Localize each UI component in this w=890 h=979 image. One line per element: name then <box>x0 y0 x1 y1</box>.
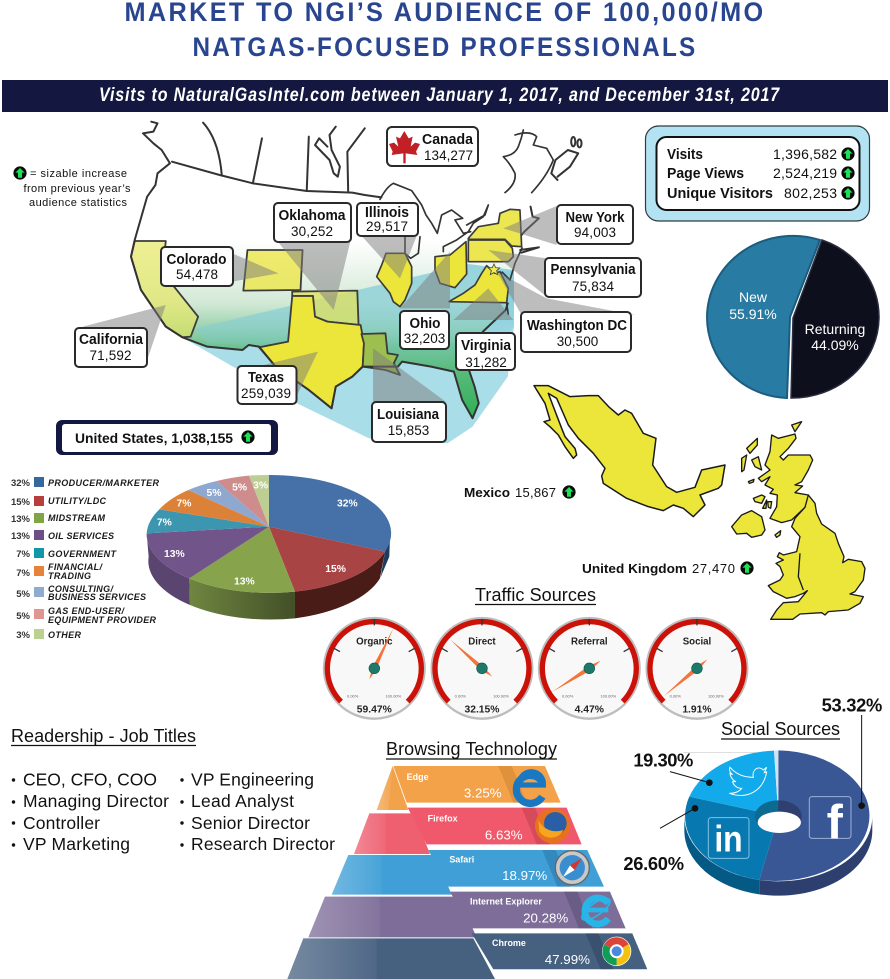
leader: Twitter <box>670 772 713 786</box>
bar: Internet Explorer: Internet Explorer <box>470 897 542 907</box>
label: United States total <box>56 420 278 455</box>
gauge: Direct: Direct <box>468 637 496 648</box>
values: 19.30% <box>633 750 693 771</box>
chart: browser pyramid <box>287 766 647 979</box>
text block: job titles left column <box>12 770 169 854</box>
pyramid tier: Safari <box>332 855 452 895</box>
label: New York <box>557 205 633 244</box>
text block: job titles left column: Controller <box>23 813 100 833</box>
label: Louisiana: Louisiana <box>377 407 440 423</box>
label: United Kingdom <box>582 561 754 576</box>
heading: Readership job titles: Readership - Job Titles <box>11 726 196 746</box>
values: 26.60% <box>623 853 684 874</box>
legend: industry pie <box>11 477 160 641</box>
text block: job titles right column: Research Director <box>191 834 335 854</box>
gauge: Social <box>647 618 747 719</box>
pyramid tier: Edge <box>377 766 408 810</box>
state: Pennsylvania <box>468 240 513 262</box>
slice: financial <box>159 490 269 527</box>
map: Great Lakes and northeast states <box>362 130 635 320</box>
label: Texas <box>238 366 296 404</box>
bar: Firefox: 6.63% <box>485 827 523 842</box>
donut side wall <box>684 816 759 894</box>
legend: industry pie: 7% <box>16 549 31 560</box>
icon: Firefox <box>535 808 570 843</box>
label: Texas: 259,039 <box>241 386 291 401</box>
label: Illinois: Illinois <box>365 205 409 221</box>
map: US land <box>131 162 520 418</box>
icon: Safari <box>555 851 589 885</box>
gauge: Social: 0.00% <box>670 694 681 699</box>
label: Mexico: 15,867 <box>515 485 556 500</box>
icon: Facebook <box>809 795 851 849</box>
state: Texas <box>259 296 364 408</box>
legend: industry pie: 5% <box>16 589 31 600</box>
label: Colorado: 54,478 <box>176 267 218 282</box>
slice: oil services <box>147 527 269 578</box>
banner: visits period: Visits to NaturalGasIntel.com between January 1, 2017, and December 31st, 2017 <box>99 85 780 106</box>
bar: Firefox <box>408 808 582 844</box>
pie value labels: 13% <box>234 577 255 588</box>
bar: Chrome: Chrome <box>492 938 526 948</box>
text block: job titles left column: CEO, CFO, COO <box>23 770 157 790</box>
donut hole <box>755 800 802 833</box>
text block: job titles left column: VP Marketing <box>23 834 130 854</box>
legend: industry pie: FINANCIAL/ <box>48 562 103 572</box>
pie value labels: 32% <box>337 498 358 509</box>
legend note: green arrow: from previous year’s <box>24 183 131 195</box>
gauge: Social: 100.00% <box>708 694 724 699</box>
pie value labels: 5% <box>207 488 221 499</box>
slice: Returning <box>791 240 879 398</box>
label: Virginia <box>456 333 515 370</box>
gauge: Referral <box>539 618 640 719</box>
map: Mexico <box>534 386 725 517</box>
gauge: Direct: 0.00% <box>455 694 466 699</box>
label: Illinois <box>357 203 418 236</box>
chart: social sources donut <box>623 695 882 896</box>
pie chart: new vs returning: 44.09% <box>811 337 859 353</box>
values: 53.32% <box>822 695 882 716</box>
legend note: green arrow <box>13 166 131 209</box>
label: Ohio: Ohio <box>410 316 441 332</box>
label: Pennsylvania: Pennsylvania <box>550 262 636 278</box>
chart: industry 3D pie <box>147 475 391 620</box>
label: Oklahoma <box>274 203 351 242</box>
map: teal overlay on land <box>195 264 514 367</box>
legend: industry pie: 13% <box>11 531 31 542</box>
bar: Safari <box>428 850 604 887</box>
label: Mexico <box>464 485 576 500</box>
banner: visits period <box>2 80 888 112</box>
state: Ohio <box>435 242 467 288</box>
stats panel: 802,253 <box>784 185 837 201</box>
slice: utility <box>269 527 385 592</box>
pie chart: new vs returning: New <box>739 289 768 305</box>
gauge: Organic: 59.47% <box>357 705 392 716</box>
label: California <box>75 328 147 367</box>
icon: LinkedIn: in <box>714 819 743 860</box>
label: California: 71,592 <box>90 348 132 363</box>
gauge: Direct: 100.00% <box>493 694 509 699</box>
callout beams <box>83 242 446 403</box>
heading: Social Sources: Social Sources <box>721 719 840 739</box>
map: blue gulf beam <box>182 264 514 443</box>
legend: industry pie: 32% <box>11 478 31 489</box>
leader: LinkedIn <box>660 805 698 828</box>
legend: industry pie: OIL SERVICES <box>48 531 114 541</box>
state: Louisiana <box>361 333 400 375</box>
state: Colorado <box>243 250 303 291</box>
stats panel: 2,524,219 <box>773 165 837 181</box>
legend: industry pie: MIDSTREAM <box>48 513 106 523</box>
label: Colorado: Colorado <box>166 252 227 268</box>
text block: job titles right column: VP Engineering <box>191 770 314 790</box>
map: Canada and coast lines <box>131 122 582 418</box>
icon: maple leaf <box>389 131 420 163</box>
label: Canada: Canada <box>422 132 474 148</box>
legend: industry pie: GOVERNMENT <box>48 549 118 559</box>
slice: midstream <box>189 527 295 593</box>
legend: industry pie: EQUIPMENT PROVIDER <box>48 615 156 625</box>
legend: industry pie: BUSINESS SERVICES <box>48 592 146 602</box>
leader: Facebook <box>858 715 865 809</box>
legend: industry pie: GAS END-USER/ <box>48 606 125 616</box>
label: Louisiana <box>372 402 446 442</box>
label: United States total: United States, 1,038,155 <box>75 431 234 446</box>
state: Oklahoma <box>292 291 359 325</box>
legend: industry pie: OTHER <box>48 630 82 640</box>
bar: Safari: Safari <box>449 855 474 865</box>
label: Washington DC <box>521 312 631 352</box>
label: New York: 94,003 <box>574 225 616 240</box>
icon: Edge <box>516 772 546 803</box>
label: Illinois: 29,517 <box>366 219 408 234</box>
label: Pennsylvania <box>545 258 641 297</box>
pie side walls <box>147 533 190 605</box>
pie value labels: 13% <box>164 549 185 560</box>
label: Oklahoma: Oklahoma <box>278 208 346 224</box>
pie value labels: 15% <box>325 564 346 575</box>
gauge: Direct <box>432 618 532 719</box>
label: Washington DC: Washington DC <box>527 318 627 334</box>
lake lines <box>380 130 553 258</box>
bar: Internet Explorer: 20.28% <box>523 911 568 926</box>
gauge: Organic: 0.00% <box>347 694 359 699</box>
stats panel: Page Views <box>667 166 744 182</box>
label: California: California <box>79 332 144 348</box>
bar: Edge <box>393 766 561 803</box>
heading: Browsing Technology: Browsing Technology <box>386 739 557 759</box>
text block: job titles right column <box>180 770 335 854</box>
slice: government <box>147 509 269 533</box>
legend: industry pie: UTILITY/LDC <box>48 496 106 506</box>
text block: job titles left column: Managing Director <box>23 791 169 811</box>
callout beams east <box>362 206 635 320</box>
pie value labels: 5% <box>232 483 247 494</box>
label: Louisiana: 15,853 <box>388 423 429 438</box>
state: Illinois <box>377 253 412 307</box>
map: United Kingdom <box>732 422 865 619</box>
icon: Facebook: f <box>827 795 844 849</box>
pyramid tier: Internet Explorer <box>308 897 477 937</box>
text block: job titles right column: Lead Analyst <box>191 791 294 811</box>
heading: Traffic Sources: Traffic Sources <box>475 585 596 605</box>
label: Colorado <box>161 247 233 286</box>
gauges: traffic sources <box>324 618 747 719</box>
pie chart: new vs returning <box>707 236 879 398</box>
legend: industry pie: 13% <box>11 514 31 525</box>
icon: Internet Explorer <box>579 895 613 924</box>
gauge: Referral: 4.47% <box>575 705 604 716</box>
bar: Safari: 18.97% <box>502 868 547 883</box>
legend: industry pie: TRADING <box>48 571 91 581</box>
state: Virginia <box>449 266 508 303</box>
label: Canada <box>387 127 478 166</box>
gauge: Social: 1.91% <box>682 705 712 716</box>
legend note: green arrow: audience statistics <box>29 197 128 209</box>
slice: consulting <box>188 481 269 527</box>
gauge: Organic <box>324 618 425 719</box>
label: Ohio: 32,203 <box>404 331 445 346</box>
state: New York <box>468 209 522 247</box>
bar: Edge: Edge <box>407 772 429 782</box>
stats panel <box>646 126 870 221</box>
legend: industry pie: 5% <box>16 611 31 622</box>
pie chart: new vs returning: 55.91% <box>729 306 777 322</box>
label: United Kingdom: United Kingdom <box>582 561 687 576</box>
bar: Chrome <box>472 933 647 969</box>
pie value labels: 3% <box>253 481 268 492</box>
gauge: Organic: Organic <box>356 637 393 648</box>
gauge: Referral: 100.00% <box>600 694 617 699</box>
label: Washington DC: 30,500 <box>557 334 598 349</box>
label: Canada: 134,277 <box>424 148 473 163</box>
slice: producer <box>269 475 391 552</box>
bar: Internet Explorer <box>450 892 626 928</box>
values <box>623 695 882 874</box>
text block: job titles right column: Senior Director <box>191 813 310 833</box>
slice: gas end-user <box>217 476 269 527</box>
legend: industry pie: CONSULTING/ <box>48 584 114 594</box>
legend: industry pie: 15% <box>11 497 31 508</box>
legend: industry pie: 3% <box>16 630 31 641</box>
coast line <box>502 247 522 315</box>
bar: Chrome: 47.99% <box>545 952 590 967</box>
label: Texas: Texas <box>248 370 284 386</box>
pyramid tier: Chrome <box>287 938 495 979</box>
legend note: green arrow: = sizable increase <box>30 168 127 180</box>
label: Pennsylvania: 75,834 <box>572 279 614 294</box>
label: United Kingdom: 27,470 <box>692 561 735 576</box>
title <box>124 0 766 62</box>
gauge: Organic: 100.00% <box>385 694 402 699</box>
label: Virginia: 31,282 <box>465 355 507 370</box>
slice: LinkedIn <box>685 797 778 880</box>
gauge: Direct: 32.15% <box>464 705 499 716</box>
bar: Firefox: Firefox <box>428 814 458 824</box>
icon: Chrome <box>602 937 631 966</box>
pyramid tier: Firefox <box>354 813 430 854</box>
slice: Facebook <box>759 750 869 881</box>
pie value labels: 7% <box>177 498 191 509</box>
gauge: Referral: Referral <box>571 637 608 648</box>
slice: other <box>249 475 269 527</box>
label: New York: New York <box>566 210 625 226</box>
label: Oklahoma: 30,252 <box>291 224 333 239</box>
slice: Twitter <box>689 751 778 816</box>
label: Mexico: Mexico <box>464 485 510 500</box>
gauge: Referral: 0.00% <box>562 694 574 699</box>
state: California <box>131 241 198 337</box>
icon: Twitter <box>729 767 767 795</box>
label: Virginia: Virginia <box>461 338 512 354</box>
icon: Washington DC star <box>488 264 500 275</box>
stats panel: Unique Visitors <box>667 186 773 202</box>
pie value labels: 7% <box>157 518 172 529</box>
stats panel: 1,396,582 <box>773 146 837 162</box>
legend: industry pie: PRODUCER/MARKETER <box>48 478 160 488</box>
label: Ohio <box>400 311 449 349</box>
slice: New <box>707 236 820 398</box>
pie chart: new vs returning: Returning <box>805 321 865 337</box>
slice: other <box>774 750 778 816</box>
gauge: Social: Social <box>683 637 711 648</box>
pie value labels <box>157 481 358 588</box>
title: NATGAS-FOCUSED PROFESSIONALS <box>192 32 698 62</box>
bar: Edge: 3.25% <box>464 786 502 801</box>
map: United States and Canada <box>83 122 582 443</box>
stats panel: Visits <box>667 147 703 163</box>
legend: industry pie: 7% <box>16 568 31 579</box>
